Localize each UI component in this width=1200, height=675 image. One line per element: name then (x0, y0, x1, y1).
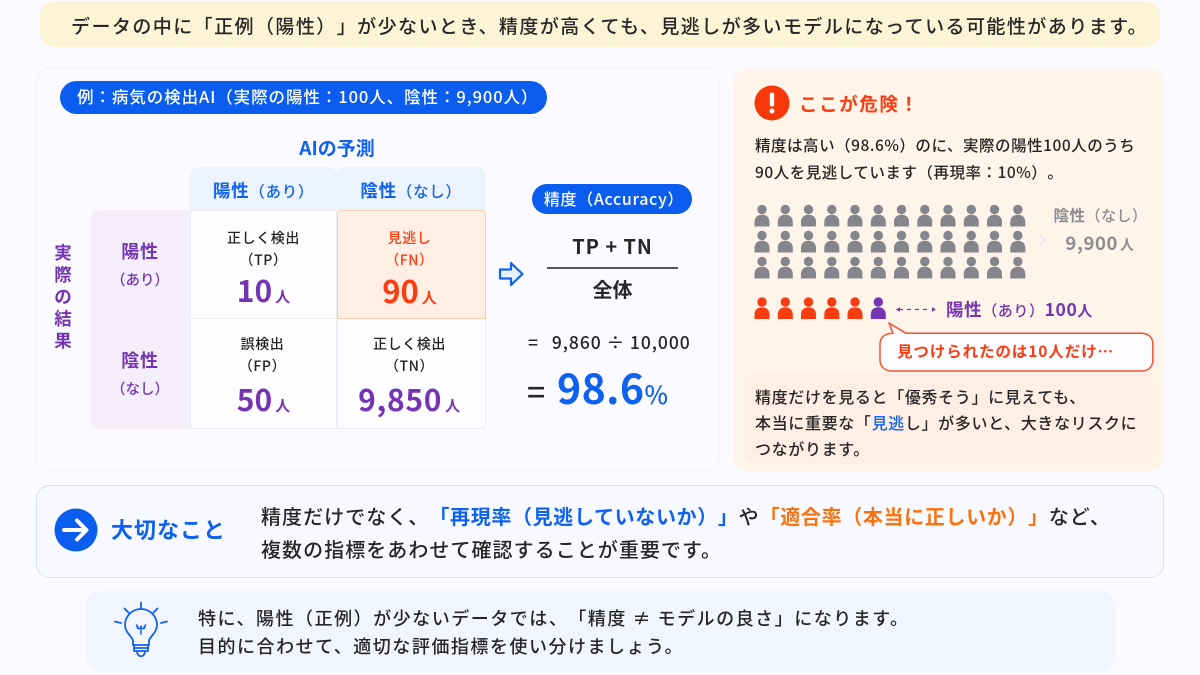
matrix row header: negative (90, 319, 190, 429)
tip text: 特に、陽性（正例）が少ないデータでは、「精度 ≠ モデルの良さ」になります。 (198, 605, 910, 631)
FN value: 90人 (382, 267, 437, 312)
TP value: 10人 (237, 267, 290, 311)
example pill text: 例：病気の検出AI（実際の陽性：100人、陰性：9,900人） (77, 84, 538, 108)
icon: faint chevron (1040, 234, 1046, 246)
people row: positives (754, 297, 936, 319)
icon: warning (754, 86, 790, 120)
cell: true negative (337, 319, 486, 429)
row label negative: 陰性 (121, 347, 159, 373)
risk note text (755, 384, 1137, 460)
label negative: 陰性（なし） (360, 178, 462, 203)
matrix column header: negative (337, 167, 485, 210)
panel: tip (85, 591, 1116, 672)
TP caption: （TP） (239, 250, 288, 270)
key point text: 複数の指標をあわせて確認することが重要です。 (261, 534, 722, 563)
TN caption: （TN） (385, 356, 434, 376)
result value: 98.6% (557, 356, 668, 416)
risk note (744, 373, 1153, 464)
callout text: 見つけられたのは10人だけ… (897, 340, 1114, 362)
callout shape (879, 322, 1154, 372)
danger description: 90人を見逃しています（再現率：10%）。 (755, 160, 1063, 182)
accuracy pill text: 精度（Accuracy） (544, 186, 684, 210)
cell: false positive (190, 319, 337, 429)
key point text (261, 501, 1111, 563)
callout: only 10 found (879, 322, 1154, 372)
positive label: 陽性（あり）100人 (946, 297, 1093, 322)
negative label: 陰性（なし） (1053, 204, 1148, 226)
icon: arrow to formula (498, 262, 524, 286)
panel: danger (733, 69, 1164, 471)
tip text: 目的に合わせて、適切な評価指標を使い分けましょう。 (198, 633, 684, 659)
TP caption (227, 228, 300, 270)
accuracy result (527, 356, 668, 416)
FP caption: （FP） (239, 356, 286, 376)
FP value: 50人 (237, 376, 290, 420)
TP caption: 正しく検出 (227, 228, 300, 248)
FN caption: 見逃し (388, 228, 431, 248)
fraction line (547, 267, 678, 269)
cell: false negative (337, 210, 486, 319)
FN caption: （FN） (385, 250, 434, 270)
banner text: データの中に「正例（陽性）」が少ないとき、精度が高くても、見逃しが多いモデルになっている可能性があります。 (71, 12, 1148, 39)
icon: light bulb (114, 602, 168, 658)
FN caption (385, 228, 434, 270)
vertical label: actual result: 実際の結果 (54, 240, 72, 353)
people grid: negatives (754, 204, 1026, 278)
row sublabel positive: （あり） (111, 269, 169, 290)
danger heading: ここが危険！ (799, 91, 920, 117)
TN caption: 正しく検出 (373, 334, 446, 354)
icon: dashed double arrow (896, 307, 936, 312)
example pill (60, 81, 547, 114)
panel: example confusion matrix (36, 67, 720, 471)
label positive: 陽性（あり） (213, 178, 314, 203)
numerator: TP + TN (572, 231, 653, 260)
icon: arrow circle (54, 508, 98, 552)
risk note text: つながります。 (755, 436, 870, 460)
tip text (198, 605, 910, 659)
row sublabel negative: （なし） (111, 378, 169, 399)
danger description: 精度は高い（98.6%）のに、実際の陽性100人のうち (755, 134, 1135, 156)
key point heading: 大切なこと (111, 513, 226, 545)
TN value: 9,850人 (358, 376, 461, 420)
top banner (40, 1, 1160, 47)
negative count: 9,900人 (1065, 230, 1135, 256)
heading: AI prediction: AIの予測 (299, 134, 375, 161)
accuracy formula (547, 231, 678, 303)
TN caption (373, 334, 446, 376)
key point text: 精度だけでなく、「再現率（見逃していないか）」や「適合率（本当に正しいか）」など、 (261, 501, 1111, 530)
panel: key point (36, 485, 1164, 578)
calculation: = 9,860 ÷ 10,000 (528, 330, 691, 355)
row label positive: 陽性 (121, 238, 159, 264)
risk note text: 精度だけを見ると「優秀そう」に見えても、 (755, 384, 1086, 408)
denominator: 全体 (592, 274, 632, 303)
accuracy pill (532, 184, 692, 214)
risk note text: 本当に重要な「見逃し」が多いと、大きなリスクに (755, 410, 1137, 434)
equals sign: = (527, 368, 545, 414)
matrix row header: positive (90, 210, 190, 319)
cell: true positive (190, 210, 337, 319)
FP caption (239, 334, 286, 376)
danger description (755, 134, 1135, 182)
FP caption: 誤検出 (241, 334, 284, 354)
matrix column header: positive (190, 167, 337, 210)
